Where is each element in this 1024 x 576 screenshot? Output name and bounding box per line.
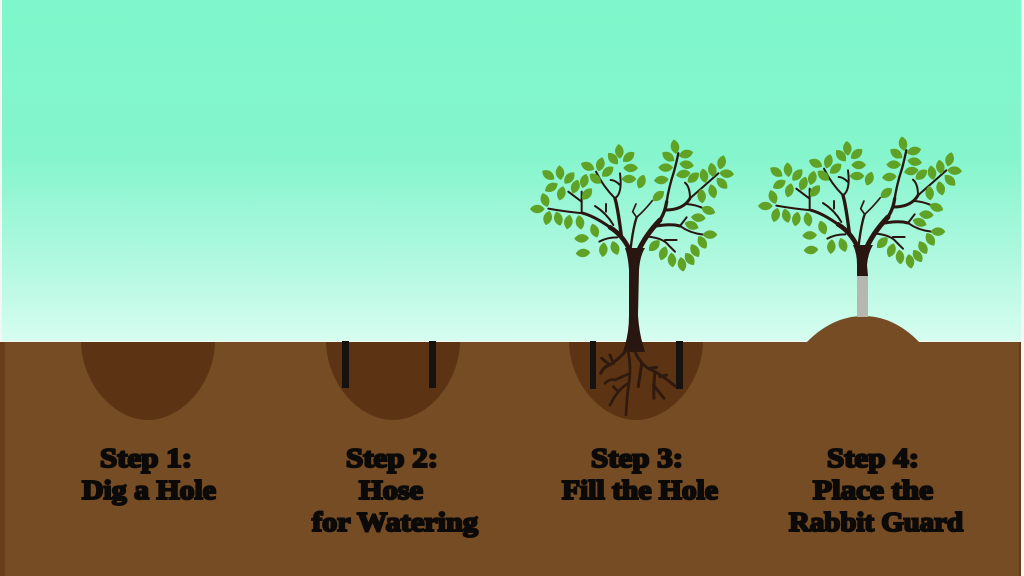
hole: step 3: [569, 342, 703, 420]
label: step 4: Rabbit Guard: [789, 507, 963, 537]
mound: [806, 316, 920, 343]
label: step 3: Fill the Hole: [562, 475, 718, 505]
label: step 4: [789, 443, 963, 537]
roots: [601, 350, 675, 415]
ground: [0, 342, 1021, 576]
crown: [758, 136, 962, 269]
label: step 2: [312, 443, 479, 537]
label: step 4: Step 4:: [827, 443, 919, 473]
hole: step 1: [81, 342, 215, 420]
label: step 1: Step 1:: [100, 443, 192, 473]
crown: [530, 139, 734, 272]
hole: step 2: [326, 342, 460, 420]
label: step 3: [562, 443, 718, 505]
trunk: [853, 245, 873, 276]
hose pipes: step 3: [590, 341, 683, 389]
tree: step 3: [530, 139, 734, 415]
label: step 1: Dig a Hole: [82, 475, 216, 505]
hose pipes: step 2: [342, 341, 436, 388]
label: step 2: Step 2:: [346, 443, 438, 473]
trunk: [623, 248, 645, 352]
rabbit guard: [857, 275, 868, 317]
tree: step 4: [758, 136, 962, 343]
label: step 3: Step 3:: [591, 443, 683, 473]
label: step 4: Place the: [813, 475, 933, 505]
sky: [2, 0, 1021, 341]
label: step 2: for Watering: [312, 507, 479, 537]
label: step 1: [82, 443, 216, 505]
label: step 2: Hose: [359, 475, 423, 505]
